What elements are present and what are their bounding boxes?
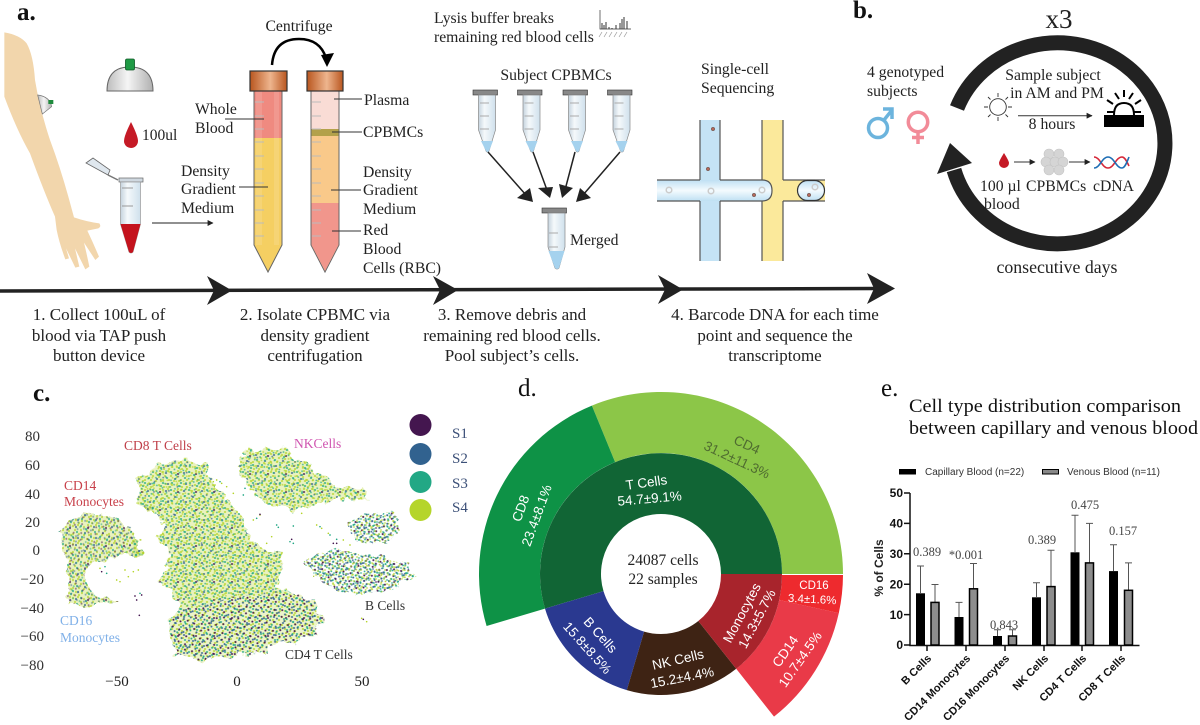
- step 3 text: Pool subject’s cells.: [445, 346, 579, 365]
- text: genotyped subjects: subjects: [867, 83, 918, 100]
- text: sample subject: [1005, 67, 1104, 102]
- y axis tick labels: [21, 429, 44, 674]
- label: density gradient medium, right: Gradient: [363, 182, 419, 199]
- panel label c: c.: [33, 380, 50, 407]
- legend: Capillary Blood (n=22): [925, 467, 1024, 478]
- icon: blood drop: [999, 153, 1009, 168]
- step 2 text: density gradient: [260, 326, 370, 345]
- arrow: cells to cDNA: [1069, 161, 1090, 163]
- label: CD8: CD8: [509, 493, 532, 524]
- label: density gradient medium, left: [181, 163, 268, 217]
- labels: sample processing: [980, 178, 1135, 213]
- heading: x3: x3: [1046, 4, 1072, 34]
- category labels: [899, 653, 1128, 724]
- arrows: subject tubes to merged tube: [488, 152, 620, 202]
- text: lysis buffer note: [434, 10, 594, 46]
- panel e: bar chart comparison: [872, 375, 1199, 724]
- y axis tick labels: −60: [21, 629, 44, 645]
- step 4 text: [671, 305, 879, 365]
- arrow: tube to centrifuge: [152, 222, 213, 224]
- label: plasma: Plasma: [364, 92, 409, 109]
- y axis tick labels: −40: [21, 601, 44, 617]
- label: red blood cells: Blood: [363, 241, 402, 258]
- label: density gradient medium, right: [331, 164, 419, 218]
- label: CD16: 3.4±1.6%: [788, 593, 837, 607]
- y axis tick labels: 60: [25, 458, 40, 474]
- icon: collection tube: [86, 158, 143, 253]
- step 3 text: remaining red blood cells.: [423, 326, 601, 345]
- label: CD4: 31.2±11.3%: [702, 438, 772, 482]
- label: density gradient medium, left: Density: [181, 163, 230, 180]
- label: monocytes: 14.3±5.7%: [735, 587, 779, 651]
- heading: single-cell sequencing: Single-cell: [701, 61, 770, 78]
- text: consecutive days: consecutive days: [997, 257, 1118, 277]
- cell type labels: CD4 T Cells: [285, 647, 353, 662]
- label: red blood cells: Red: [363, 222, 388, 239]
- label: CD16: [788, 580, 837, 607]
- arrow: eight hours: [1018, 115, 1092, 117]
- legend: subjects: [410, 414, 468, 521]
- x axis tick labels: 50: [354, 674, 370, 690]
- category labels: CD14 Monocytes: [902, 653, 973, 724]
- panel c: tSNE scatter plot: [21, 380, 468, 690]
- icon: arm with TAP device: [4, 32, 100, 269]
- label: NK cells: NK Cells: [651, 646, 705, 673]
- category labels: B Cells: [899, 653, 934, 687]
- p values: 0.389: [1028, 533, 1056, 547]
- label: CD14: CD14: [769, 633, 802, 670]
- p values: 0.843: [990, 618, 1018, 632]
- step 2 text: centrifugation: [267, 346, 363, 365]
- icon: tiny bar chart: [599, 10, 631, 37]
- label: monocytes: [720, 580, 779, 651]
- x axis tick labels: 0: [233, 674, 241, 690]
- step 3 text: 3. Remove debris and: [438, 305, 587, 324]
- y axis tick labels: 40: [25, 487, 40, 503]
- heading: single-cell sequencing: [701, 61, 774, 97]
- x axis tick labels: [105, 674, 370, 690]
- cell type labels: NKCells: [294, 436, 341, 451]
- step 2 text: [240, 305, 391, 365]
- cell type labels: CD8 T Cells: [124, 438, 192, 453]
- icon: cDNA helix: [1094, 157, 1129, 168]
- axes: [904, 493, 1140, 651]
- text: sample subject: Sample subject: [1005, 67, 1101, 84]
- tube: before centrifuge: [250, 71, 287, 272]
- category labels: CD4 T Cells: [1037, 653, 1089, 704]
- p values: 0.157: [1109, 524, 1137, 538]
- y axis tick labels: 0: [896, 638, 903, 652]
- y axis tick labels: −20: [21, 572, 44, 588]
- legend: [900, 467, 1160, 478]
- labels: sample processing: CPBMCs: [1026, 178, 1086, 195]
- legend: subjects: S1: [452, 426, 468, 442]
- tube: after centrifuge: [307, 71, 343, 272]
- step 1 text: blood via TAP push: [32, 326, 167, 345]
- label: red blood cells: [332, 222, 441, 277]
- y axis tick labels: 50: [890, 486, 903, 500]
- chart title: Cell type distribution comparison: [909, 397, 1181, 417]
- y axis tick labels: 30: [890, 547, 903, 561]
- x axis tick labels: −50: [105, 674, 129, 690]
- sunburst: center label: [627, 552, 699, 588]
- labels: sample processing: 100 µl: [980, 178, 1021, 195]
- tube: merged: [542, 208, 566, 269]
- step 4 text: point and sequence the: [697, 326, 853, 345]
- chart title: between capillary and venous blood: [909, 419, 1199, 439]
- y axis tick labels: −80: [21, 658, 44, 674]
- sunburst: CD16 segment: [779, 575, 843, 613]
- y axis title: % of Cells: [872, 539, 886, 597]
- sunburst: T cells ring: [540, 453, 782, 609]
- scatter clusters: [50, 440, 425, 667]
- sunburst: CD4 segment: [592, 392, 843, 574]
- panel a: blood collection workflow: [0, 0, 895, 365]
- icon: sunset: [1104, 90, 1144, 127]
- icon: blood drop with volume: [124, 122, 177, 148]
- step 1 text: button device: [53, 346, 145, 365]
- icon: TAP push button device: [107, 59, 153, 91]
- cell type labels: CD14: [64, 478, 97, 493]
- label: density gradient medium, left: Gradient: [181, 181, 237, 198]
- label: CD14: 10.7±4.5%: [776, 629, 825, 690]
- sunburst: NK cells ring: [627, 621, 736, 695]
- label: T cells: T Cells: [625, 472, 668, 493]
- text: genotyped subjects: 4 genotyped: [867, 64, 944, 81]
- label: CD4: CD4: [731, 432, 763, 458]
- label: whole blood: Blood: [195, 120, 234, 137]
- sunburst: center label: 22 samples: [628, 571, 698, 588]
- icon: female symbol: [908, 112, 928, 144]
- y axis tick labels: 10: [890, 608, 903, 622]
- p values: *0.001: [949, 548, 983, 562]
- category labels: CD16 Monocytes: [941, 653, 1012, 724]
- tubes: four subject tubes: [473, 90, 632, 152]
- p values: [913, 498, 1137, 632]
- diagram: microfluidic droplet channels: [657, 120, 825, 261]
- cell type labels: [60, 436, 405, 662]
- sunburst: B cells ring: [545, 591, 644, 690]
- y axis tick labels: 40: [890, 516, 903, 530]
- y axis tick labels: 80: [25, 429, 40, 445]
- label: CPBMCs: [332, 124, 423, 141]
- panel label e: e.: [881, 375, 898, 402]
- venous blood bars: [931, 563, 1132, 645]
- label: density gradient medium, right: Medium: [363, 201, 416, 218]
- sunburst: CD14 segment: [736, 600, 839, 717]
- y axis tick labels: 20: [25, 515, 40, 531]
- chart title: [909, 397, 1199, 439]
- arrow: blood to cells: [1014, 161, 1035, 163]
- cell type labels: Monocytes: [64, 494, 124, 509]
- label: B cells: 15.8±8.5%: [560, 619, 614, 677]
- category labels: CD8 T Cells: [1076, 653, 1128, 704]
- label: density gradient medium, right: Density: [363, 164, 412, 181]
- panel d: sunburst of cell types: [479, 375, 843, 717]
- step 2 text: 2. Isolate CPBMC via: [240, 305, 391, 324]
- label: T cells: 54.7±9.1%: [617, 488, 682, 509]
- text: genotyped subjects: [867, 64, 944, 100]
- y axis tick labels: 20: [890, 578, 903, 592]
- p values: 0.475: [1071, 498, 1099, 512]
- legend: subjects: S3: [452, 476, 468, 492]
- legend: subjects: S4: [452, 500, 468, 516]
- label: CPBMCs: CPBMCs: [363, 124, 423, 141]
- text: lysis buffer note: Lysis buffer breaks: [434, 10, 554, 27]
- sunburst: CD8 segment: [479, 406, 615, 626]
- icon: CPBMC cluster: [1041, 149, 1068, 175]
- capillary blood bars: [916, 552, 1118, 645]
- icon: blood drop with volume: 100ul: [142, 127, 177, 144]
- p values: 0.389: [913, 545, 941, 559]
- heading: subject CPBMCs: Subject CPBMCs: [500, 67, 612, 84]
- labels: sample processing: blood: [984, 196, 1020, 213]
- y axis tick labels: [890, 486, 903, 652]
- cell type labels: Monocytes: [60, 630, 120, 645]
- icon: sun: [984, 93, 1012, 121]
- panel b: sampling protocol: [853, 0, 1165, 277]
- step 1 text: [32, 305, 167, 365]
- label: T cells: [617, 472, 682, 509]
- legend: Venous Blood (n=11): [1067, 467, 1160, 478]
- label: CD8: 23.4±8.1%: [519, 483, 555, 548]
- label: red blood cells: Cells (RBC): [363, 260, 441, 277]
- label: NK cells: 15.2±4.4%: [649, 664, 715, 691]
- text: sample subject: in AM and PM: [1010, 85, 1104, 102]
- heading: single-cell sequencing: Sequencing: [701, 80, 774, 97]
- text: lysis buffer note: remaining red blood cells: [434, 29, 594, 46]
- labels: sample processing: cDNA: [1093, 178, 1135, 195]
- arrow: centrifuge: [272, 39, 334, 67]
- cell type labels: B Cells: [365, 598, 405, 613]
- label: monocytes: Monocytes: [720, 580, 764, 645]
- label: whole blood: Whole: [195, 101, 237, 118]
- sunburst: monocytes ring: [698, 574, 782, 669]
- step 4 text: 4. Barcode DNA for each time: [671, 305, 879, 324]
- timeline arrow with four stages: [0, 273, 895, 305]
- step 4 text: transcriptome: [728, 346, 822, 365]
- step 3 text: [423, 305, 601, 365]
- sunburst: center label: 24087 cells: [627, 552, 699, 569]
- panel label d: d.: [518, 375, 537, 402]
- heading: centrifuge: Centrifuge: [265, 18, 333, 35]
- step 1 text: 1. Collect 100uL of: [33, 305, 166, 324]
- label: B cells: B Cells: [580, 614, 620, 656]
- label: CD16: CD16: [799, 580, 829, 592]
- label: density gradient medium, left: Medium: [181, 200, 234, 217]
- cell type labels: CD16: [60, 613, 93, 628]
- legend: subjects: S2: [452, 451, 468, 467]
- text: eight hours: 8 hours: [1029, 116, 1075, 133]
- error bars: [917, 515, 1132, 636]
- y axis tick labels: 0: [32, 543, 40, 559]
- icon: male symbol: [868, 109, 892, 138]
- label: merged: Merged: [570, 232, 619, 249]
- label: whole blood: [195, 101, 264, 137]
- label: plasma: [334, 92, 409, 109]
- label: NK cells: [649, 646, 715, 691]
- cycle arrow ring: [937, 43, 1165, 244]
- category labels: NK Cells: [1011, 653, 1051, 693]
